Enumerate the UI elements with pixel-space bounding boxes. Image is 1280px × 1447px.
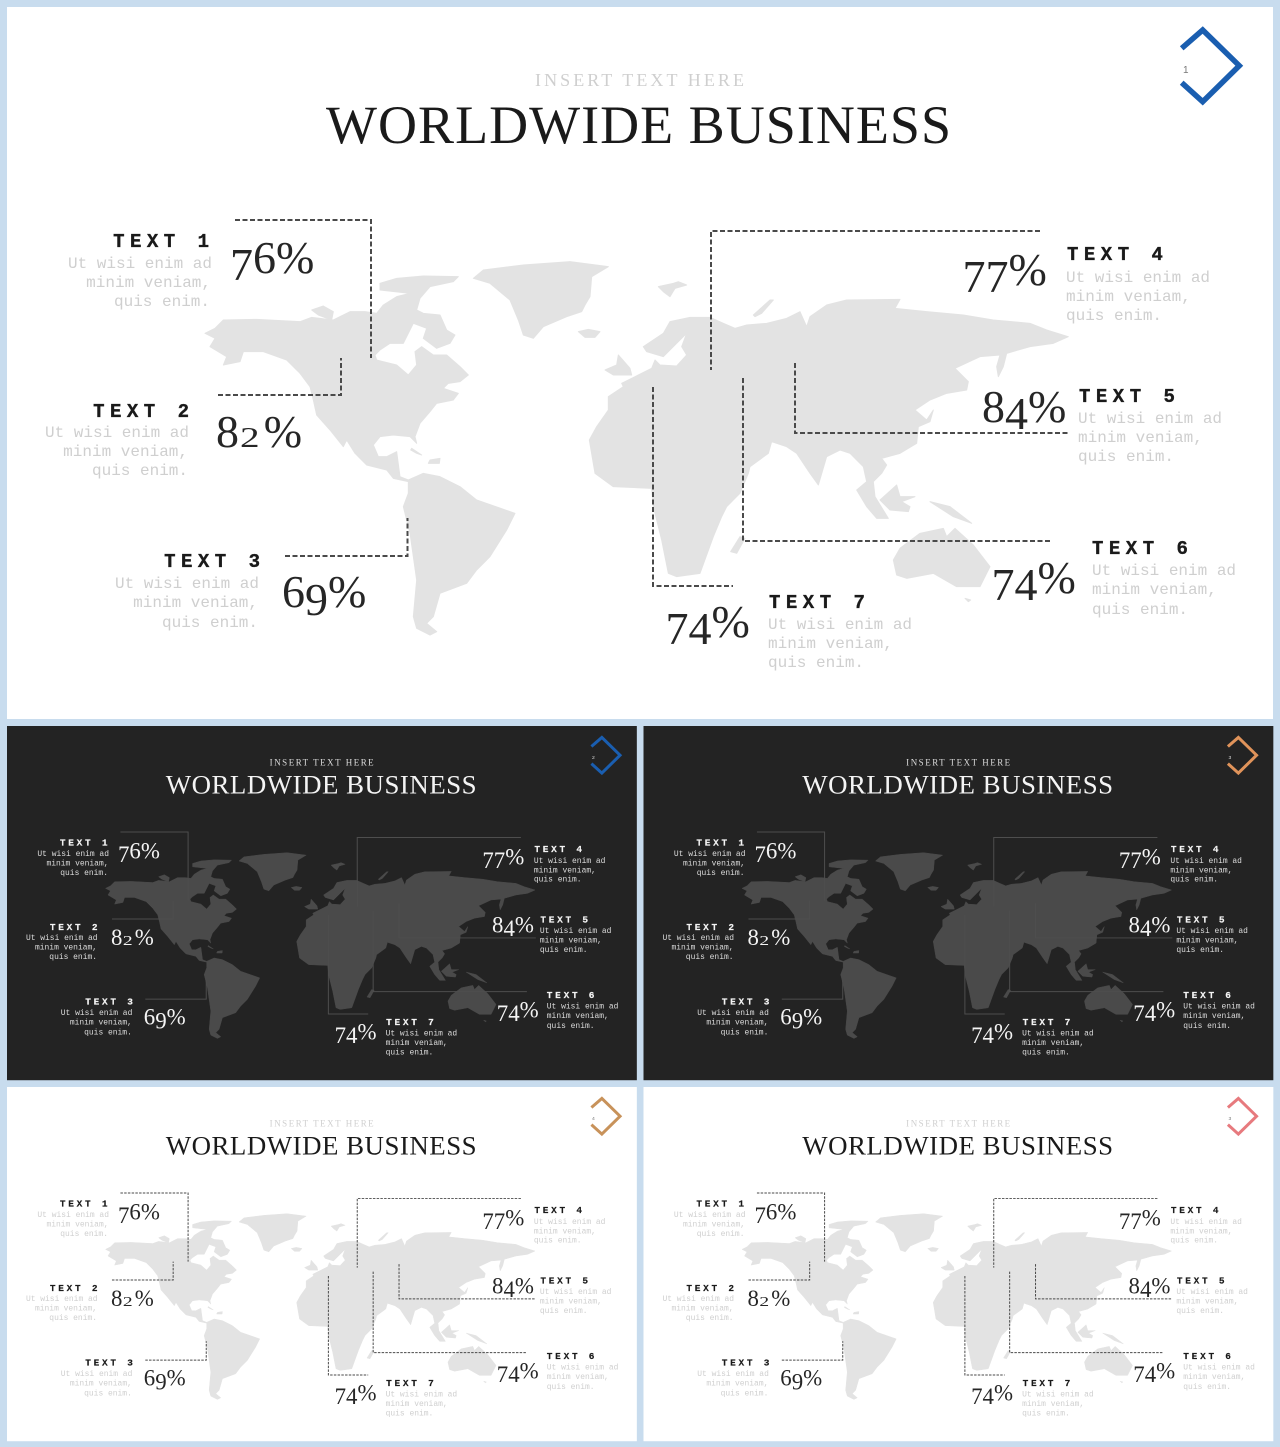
label: text 2: TEXT 2 [50, 922, 100, 933]
label: text 4: TEXT 4 [1171, 1205, 1221, 1216]
title: WORLDWIDE BUSINESS [802, 1131, 1113, 1161]
label: text 1: minim veniam, [683, 859, 745, 868]
icon: numbered diamond [591, 737, 620, 773]
label: text 3: quis enim. [721, 1389, 768, 1398]
label: text 7: Ut wisi enim ad [768, 616, 912, 634]
label: text 5: % [1151, 1273, 1171, 1298]
label: text 2: Ut wisi enim ad [662, 934, 734, 943]
label: text 3: % [167, 1365, 186, 1390]
label: text 7: minim veniam, [768, 635, 893, 653]
label: text 7 [971, 1378, 1094, 1418]
label: text 2: % [771, 1286, 790, 1311]
label: text 1 [37, 1198, 160, 1239]
label: text 5: quis enim. [1078, 448, 1174, 466]
label: text 4: quis enim. [1066, 307, 1162, 325]
panel: dark slide 2 [7, 726, 637, 1080]
label: text 1: quis enim. [114, 293, 210, 311]
label: text 2: Ut wisi enim ad [26, 934, 98, 943]
label: text 2: quis enim. [49, 1314, 97, 1323]
label: text 7: minim veniam, [386, 1039, 448, 1048]
label: text 3: minim veniam, [70, 1379, 132, 1388]
label: text 4: TEXT 4 [1067, 244, 1168, 266]
label: text 6 [497, 1351, 619, 1392]
label: text 4: % [1142, 1205, 1161, 1230]
label: text 7: Ut wisi enim ad [386, 1390, 457, 1399]
label: text 7: % [357, 1019, 377, 1044]
label: text 6: minim veniam, [1092, 581, 1217, 599]
label: text 2: 2 [759, 1294, 769, 1309]
label: text 2: 8 [747, 925, 759, 950]
connector lines [112, 1193, 536, 1375]
label: text 1: 6% [766, 1199, 796, 1224]
label: text 6: TEXT 6 [547, 1351, 597, 1362]
label: text 6: Ut wisi enim ad [1092, 562, 1236, 580]
label: text 3 [697, 997, 822, 1037]
icon: numbered diamond: 4 [592, 1116, 595, 1122]
label: text 4: quis enim. [1170, 1237, 1218, 1246]
label: text 1: Ut wisi enim ad [674, 850, 746, 859]
label: text 3: TEXT 3 [85, 997, 136, 1008]
label: text 4: minim veniam, [1170, 1227, 1232, 1236]
label: text 5: 8 [1129, 1273, 1140, 1298]
panel: large light slide [7, 7, 1273, 719]
label: text 3: % [803, 1365, 822, 1390]
label: text 6 [1133, 990, 1255, 1031]
label: text 5: Ut wisi enim ad [1176, 1288, 1248, 1297]
label: text 5: TEXT 5 [1177, 1276, 1227, 1287]
panel: light slide 5 [644, 1087, 1273, 1441]
label: text 7 [335, 1378, 457, 1418]
label: text 6: TEXT 6 [1183, 1351, 1234, 1362]
label: text 4: quis enim. [534, 876, 582, 885]
label: text 7: TEXT 7 [386, 1017, 437, 1028]
label: text 5: 8 [1129, 912, 1140, 937]
label: text 5 [1129, 1273, 1248, 1316]
label: text 1: Ut wisi enim ad [37, 1211, 109, 1220]
label: text 1 [674, 1198, 796, 1239]
label: text 7: % [712, 596, 750, 647]
label: text 5: TEXT 5 [540, 1276, 591, 1287]
label: text 7: Ut wisi enim ad [1022, 1029, 1094, 1038]
label: text 4: Ut wisi enim ad [1066, 269, 1210, 287]
label: text 2: quis enim. [49, 953, 97, 962]
label: text 1: 7 [754, 842, 766, 867]
label: text 5: minim veniam, [540, 936, 602, 945]
label: text 3: 6 [144, 1004, 155, 1030]
label: text 7: minim veniam, [1022, 1400, 1084, 1409]
label: text 6: minim veniam, [547, 1012, 609, 1021]
label: text 6: quis enim. [547, 1022, 595, 1031]
subtitle: INSERT TEXT HERE [906, 757, 1011, 767]
label: text 3: Ut wisi enim ad [61, 1370, 133, 1379]
label: text 7: quis enim. [1022, 1409, 1070, 1418]
label: text 5: 8 [982, 381, 1005, 432]
label: text 2: % [771, 925, 790, 950]
label: text 6: 74 [497, 1362, 520, 1387]
label: text 3: 9 [792, 1369, 803, 1394]
label: text 4 [482, 1205, 606, 1246]
label: text 7: TEXT 7 [1023, 1017, 1073, 1028]
label: text 5: Ut wisi enim ad [1176, 927, 1248, 936]
label: text 5: minim veniam, [1078, 429, 1203, 447]
label: text 4: % [505, 1205, 524, 1230]
label: text 6: % [1156, 998, 1175, 1023]
label: text 6: TEXT 6 [547, 990, 597, 1001]
title: WORLDWIDE BUSINESS [166, 770, 477, 800]
label: text 1: 6% [766, 838, 796, 863]
label: text 3: TEXT 3 [722, 1358, 772, 1369]
label: text 1: Ut wisi enim ad [37, 850, 109, 859]
icon: numbered diamond [1228, 737, 1257, 773]
label: text 6: 74 [497, 1001, 520, 1026]
label: text 7: quis enim. [1022, 1048, 1070, 1057]
label: text 7: 74 [335, 1023, 358, 1048]
label: text 2: minim veniam, [63, 443, 188, 461]
label: text 3: quis enim. [84, 1028, 132, 1037]
subtitle: INSERT TEXT HERE [270, 1118, 374, 1128]
label: text 3: minim veniam, [706, 1379, 768, 1388]
label: text 3: TEXT 3 [722, 997, 772, 1008]
label: text 3 [61, 1358, 186, 1398]
label: text 4 [1119, 1205, 1242, 1246]
label: text 6: % [520, 998, 539, 1023]
label: text 5: TEXT 5 [1079, 386, 1180, 408]
label: text 2 [45, 401, 302, 480]
label: text 2: % [264, 406, 302, 457]
label: text 1: 6% [253, 232, 314, 283]
label: text 4: 77 [482, 1209, 505, 1234]
label: text 4: minim veniam, [534, 1227, 596, 1236]
icon: numbered diamond [1182, 30, 1239, 102]
title: WORLDWIDE BUSINESS [166, 1131, 477, 1161]
label: text 3: 6 [780, 1004, 792, 1030]
label: text 1: quis enim. [697, 1230, 744, 1239]
label: text 2: Ut wisi enim ad [662, 1295, 734, 1304]
label: text 4: Ut wisi enim ad [1170, 857, 1242, 866]
label: text 3: 6 [282, 566, 305, 617]
subtitle: INSERT TEXT HERE [270, 757, 374, 767]
label: text 2: 8 [111, 1286, 122, 1311]
label: text 2: minim veniam, [672, 1304, 734, 1313]
subtitle: INSERT TEXT HERE [906, 1118, 1011, 1128]
label: text 2: quis enim. [686, 953, 734, 962]
label: text 6: minim veniam, [1183, 1373, 1245, 1382]
label: text 4: Ut wisi enim ad [534, 857, 606, 866]
label: text 4: % [1008, 244, 1047, 295]
label: text 7: TEXT 7 [769, 592, 870, 614]
label: text 4: TEXT 4 [534, 844, 585, 855]
label: text 4: 77 [1119, 848, 1142, 873]
label: text 3: TEXT 3 [85, 1358, 136, 1369]
label: text 6: Ut wisi enim ad [547, 1003, 619, 1012]
label: text 1 [68, 231, 314, 311]
label: text 6: Ut wisi enim ad [1183, 1003, 1255, 1012]
label: text 2: % [135, 925, 154, 950]
label: text 2: 2 [123, 933, 133, 948]
label: text 4 [1119, 844, 1242, 885]
label: text 3: Ut wisi enim ad [61, 1009, 133, 1018]
label: text 7: % [994, 1380, 1013, 1405]
label: text 2: TEXT 2 [686, 1283, 737, 1294]
label: text 3: 6 [780, 1366, 792, 1390]
label: text 2: 2 [123, 1294, 133, 1309]
label: text 3: quis enim. [84, 1389, 132, 1398]
label: text 5 [1129, 912, 1248, 955]
label: text 7: 74 [666, 603, 712, 654]
label: text 5 [492, 1273, 612, 1316]
label: text 4: 77 [962, 251, 1008, 302]
label: text 2: 2 [759, 933, 769, 948]
label: text 5: 4 [1140, 916, 1152, 941]
subtitle: INSERT TEXT HERE [535, 70, 744, 90]
label: text 1: 7 [230, 239, 253, 290]
label: text 3: 9 [155, 1369, 167, 1394]
label: text 5: 8 [492, 912, 504, 937]
label: text 3: 9 [305, 574, 328, 625]
icon: numbered diamond: 3 [1229, 1116, 1232, 1122]
label: text 5: 4 [504, 916, 516, 941]
icon: numbered diamond [1228, 1098, 1257, 1134]
label: text 7: Ut wisi enim ad [1022, 1390, 1094, 1399]
label: text 6: 74 [1133, 1001, 1157, 1026]
label: text 6: % [1156, 1359, 1175, 1384]
label: text 5: 4 [504, 1277, 516, 1302]
label: text 7: 74 [971, 1384, 995, 1409]
label: text 7 [666, 592, 912, 672]
label: text 3: 9 [792, 1008, 803, 1033]
world map [742, 853, 1172, 1038]
icon: numbered diamond [591, 1098, 620, 1134]
label: text 1: 7 [118, 842, 129, 867]
label: text 5 [982, 381, 1222, 466]
label: text 6: quis enim. [547, 1383, 595, 1392]
label: text 7: TEXT 7 [1023, 1378, 1073, 1389]
label: text 5: quis enim. [1176, 1307, 1224, 1316]
label: text 6 [992, 538, 1236, 619]
world map [205, 262, 1068, 635]
label: text 2: 8 [747, 1286, 759, 1311]
label: text 4: minim veniam, [1066, 288, 1191, 306]
label: text 4 [962, 244, 1210, 325]
label: text 4: TEXT 4 [534, 1205, 585, 1216]
label: text 6: quis enim. [1183, 1383, 1231, 1392]
label: text 4: minim veniam, [534, 866, 596, 875]
label: text 6: TEXT 6 [1092, 538, 1193, 560]
label: text 5: quis enim. [540, 946, 588, 955]
label: text 5: % [515, 1273, 534, 1298]
label: text 1: minim veniam, [46, 859, 108, 868]
label: text 2: minim veniam, [672, 943, 734, 952]
label: text 7: 74 [971, 1023, 995, 1048]
label: text 3: 9 [155, 1008, 167, 1033]
label: text 2 [662, 1283, 790, 1323]
label: text 4: minim veniam, [1170, 866, 1232, 875]
label: text 2: 8 [216, 406, 239, 457]
label: text 7: TEXT 7 [386, 1378, 437, 1389]
label: text 1: 6% [129, 1199, 160, 1224]
label: text 4: % [1142, 844, 1161, 869]
label: text 1: minim veniam, [86, 274, 211, 292]
label: text 5: quis enim. [1176, 946, 1224, 955]
label: text 5: 8 [492, 1273, 504, 1298]
label: text 2: TEXT 2 [686, 922, 737, 933]
label: text 7: Ut wisi enim ad [386, 1029, 457, 1038]
label: text 5 [492, 912, 612, 955]
label: text 5: Ut wisi enim ad [540, 927, 612, 936]
label: text 1: quis enim. [60, 869, 108, 878]
label: text 5: % [1028, 381, 1066, 432]
label: text 2 [662, 922, 790, 962]
label: text 3: minim veniam, [706, 1019, 768, 1028]
label: text 1: 7 [754, 1203, 766, 1228]
label: text 2: 2 [240, 423, 260, 454]
label: text 2 [26, 1283, 154, 1323]
label: text 3 [115, 551, 366, 632]
connector lines [748, 1193, 1172, 1375]
label: text 1: TEXT 1 [113, 231, 214, 253]
label: text 7: quis enim. [768, 654, 864, 672]
label: text 4: % [505, 844, 524, 869]
label: text 6: minim veniam, [1183, 1012, 1245, 1021]
label: text 6: quis enim. [1183, 1022, 1231, 1031]
label: text 5: TEXT 5 [1177, 915, 1227, 926]
label: text 7: quis enim. [386, 1409, 433, 1418]
label: text 7: minim veniam, [386, 1400, 448, 1409]
label: text 5: % [515, 912, 534, 937]
label: text 7: % [357, 1380, 377, 1405]
label: text 6: % [520, 1359, 539, 1384]
label: text 2: minim veniam, [35, 943, 97, 952]
label: text 4: Ut wisi enim ad [534, 1218, 606, 1227]
label: text 2: % [135, 1286, 154, 1311]
label: text 1: TEXT 1 [696, 1198, 747, 1209]
label: text 7: 74 [335, 1384, 358, 1409]
label: text 4: 77 [1119, 1209, 1142, 1234]
label: text 6: Ut wisi enim ad [547, 1364, 619, 1373]
label: text 1: 7 [118, 1203, 129, 1228]
label: text 1: Ut wisi enim ad [674, 1211, 746, 1220]
label: text 2: minim veniam, [35, 1304, 97, 1313]
world map [106, 1214, 535, 1399]
label: text 6 [497, 990, 619, 1031]
label: text 5: 4 [1005, 388, 1028, 439]
label: text 3: TEXT 3 [164, 551, 266, 573]
icon: numbered diamond: 1 [1183, 65, 1189, 76]
label: text 1: 6% [129, 838, 160, 863]
label: text 5: Ut wisi enim ad [540, 1288, 612, 1297]
world map [106, 853, 535, 1038]
label: text 6: Ut wisi enim ad [1183, 1364, 1255, 1373]
label: text 2: Ut wisi enim ad [45, 424, 189, 442]
label: text 6: % [1038, 552, 1076, 603]
label: text 2: TEXT 2 [93, 401, 194, 423]
label: text 5: Ut wisi enim ad [1078, 410, 1222, 428]
connector lines [112, 832, 536, 1014]
label: text 6: 74 [1133, 1362, 1157, 1387]
label: text 7 [971, 1017, 1094, 1057]
title: WORLDWIDE BUSINESS [802, 770, 1113, 800]
label: text 4: quis enim. [534, 1237, 582, 1246]
label: text 6: quis enim. [1092, 601, 1188, 619]
label: text 7: quis enim. [386, 1048, 433, 1057]
label: text 3: quis enim. [721, 1028, 768, 1037]
label: text 1: minim veniam, [46, 1220, 108, 1229]
label: text 1: Ut wisi enim ad [68, 255, 212, 273]
label: text 2: TEXT 2 [50, 1283, 100, 1294]
panel: dark slide 3 [644, 726, 1273, 1080]
label: text 3: quis enim. [162, 614, 258, 632]
label: text 3: % [167, 1005, 186, 1030]
label: text 5: minim veniam, [1176, 936, 1238, 945]
label: text 1: quis enim. [697, 869, 744, 878]
label: text 3: 6 [144, 1366, 155, 1390]
label: text 3: minim veniam, [133, 594, 258, 612]
label: text 3 [61, 997, 186, 1037]
title: WORLDWIDE BUSINESS [326, 95, 951, 155]
label: text 4 [482, 844, 606, 885]
icon: numbered diamond: 2 [592, 755, 595, 761]
label: text 7 [335, 1017, 457, 1057]
label: text 6: 74 [992, 559, 1038, 610]
label: text 4: TEXT 4 [1171, 844, 1221, 855]
label: text 4: Ut wisi enim ad [1170, 1218, 1242, 1227]
label: text 2 [26, 922, 154, 962]
label: text 6: minim veniam, [547, 1373, 609, 1382]
label: text 2: Ut wisi enim ad [26, 1295, 98, 1304]
connector lines [218, 220, 1070, 586]
label: text 1: TEXT 1 [60, 837, 110, 848]
label: text 4: 77 [482, 848, 505, 873]
label: text 3: Ut wisi enim ad [115, 575, 259, 593]
icon: numbered diamond: 3 [1229, 755, 1232, 761]
label: text 1: quis enim. [60, 1230, 108, 1239]
label: text 5: TEXT 5 [540, 915, 591, 926]
label: text 5: quis enim. [540, 1307, 588, 1316]
label: text 1: TEXT 1 [60, 1198, 110, 1209]
label: text 6 [1133, 1351, 1255, 1392]
label: text 6: TEXT 6 [1183, 990, 1234, 1001]
connector lines [748, 832, 1172, 1014]
label: text 1 [37, 837, 160, 878]
label: text 5: minim veniam, [1176, 1297, 1238, 1306]
label: text 3: % [328, 566, 366, 617]
label: text 3: Ut wisi enim ad [697, 1009, 769, 1018]
label: text 5: minim veniam, [540, 1297, 602, 1306]
label: text 5: % [1151, 912, 1171, 937]
label: text 2: quis enim. [92, 462, 188, 480]
label: text 2: quis enim. [686, 1314, 734, 1323]
label: text 1: minim veniam, [683, 1220, 745, 1229]
label: text 3: Ut wisi enim ad [697, 1370, 769, 1379]
label: text 7: minim veniam, [1022, 1039, 1084, 1048]
label: text 2: 8 [111, 925, 122, 950]
label: text 4: quis enim. [1170, 876, 1218, 885]
label: text 3: minim veniam, [70, 1019, 132, 1028]
label: text 7: % [994, 1019, 1013, 1044]
label: text 3 [697, 1358, 822, 1398]
label: text 5: 4 [1140, 1277, 1152, 1302]
label: text 1 [674, 837, 796, 878]
panel: light slide 4 [7, 1087, 637, 1441]
label: text 3: % [803, 1005, 822, 1030]
label: text 1: TEXT 1 [696, 837, 747, 848]
world map [742, 1214, 1172, 1399]
